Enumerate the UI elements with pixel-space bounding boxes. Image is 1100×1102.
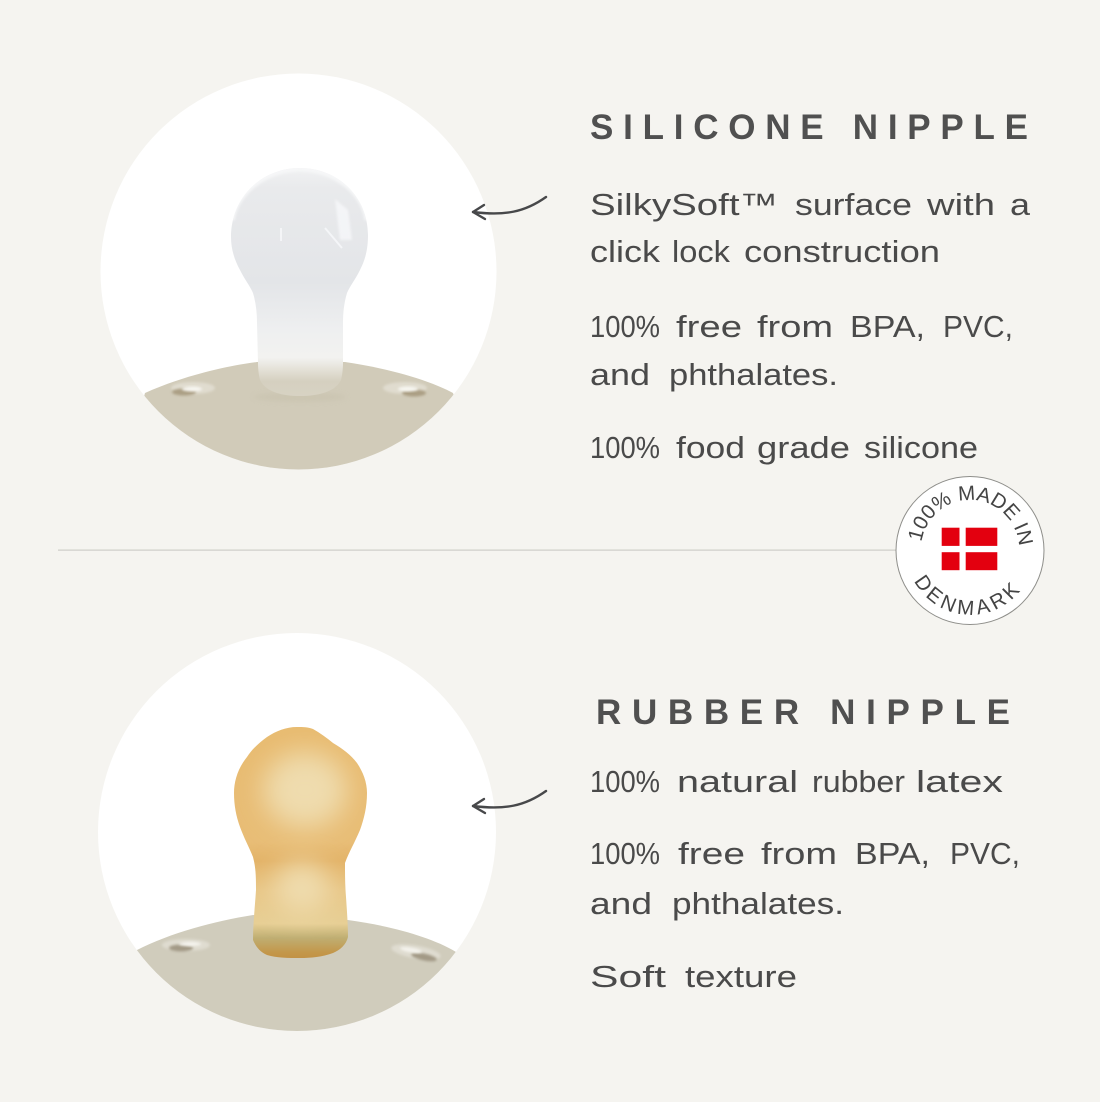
heading: silicone nipple: SILICONE NIPPLE xyxy=(590,108,1028,147)
badge: 100% made in Denmark xyxy=(896,476,1044,625)
text block: rubber features: texture xyxy=(685,959,797,994)
text block: silicone features: free xyxy=(676,309,742,344)
text block: rubber features: phthalates. xyxy=(672,886,844,921)
text block: rubber features: latex xyxy=(916,764,1004,799)
rubber nipple xyxy=(234,727,367,958)
badge text: DENMARK xyxy=(914,574,1020,615)
text block: silicone features: lock xyxy=(672,234,731,269)
text block: silicone features: with xyxy=(926,187,995,222)
text block: silicone features: phthalates. xyxy=(669,357,838,392)
heading: rubber nipple: RUBBER NIPPLE xyxy=(596,693,1010,732)
badge text: 100% MADE IN xyxy=(908,486,1033,545)
arrow: silicone xyxy=(473,197,546,219)
text block: silicone features xyxy=(590,187,1031,465)
text block: rubber features: from xyxy=(761,836,837,871)
text block: rubber features: rubber xyxy=(812,764,905,799)
text block: rubber features: 100% xyxy=(590,836,660,871)
text block: silicone features: grade xyxy=(757,430,850,465)
text block: silicone features: 100% xyxy=(590,309,660,344)
section divider line xyxy=(58,550,898,551)
text block: silicone features: a xyxy=(1010,187,1031,222)
text block: silicone features: 100% xyxy=(590,430,660,465)
icon: Danish flag xyxy=(942,528,997,570)
text block: silicone features: BPA, xyxy=(850,309,925,344)
text block: silicone features: SilkySoft™ xyxy=(590,187,778,222)
text block: silicone features: construction xyxy=(744,234,940,269)
panel: rubber nipple photo xyxy=(98,633,496,1040)
panel: silicone nipple photo xyxy=(100,74,496,480)
text block: rubber features: PVC, xyxy=(950,836,1020,871)
text block: rubber features: 100% xyxy=(590,764,660,799)
silicone nipple xyxy=(231,168,368,396)
pacifier shield (silicone) xyxy=(144,362,454,470)
arrow: rubber xyxy=(473,791,546,813)
text block: silicone features: and xyxy=(590,357,650,392)
badge text xyxy=(908,486,1033,615)
text block: rubber features: free xyxy=(678,836,745,871)
text block: rubber features: and xyxy=(590,886,652,921)
text block: rubber features: Soft xyxy=(590,959,667,994)
text block: silicone features: click xyxy=(590,234,661,269)
text block: silicone features: food xyxy=(676,430,745,465)
pacifier shield (rubber) xyxy=(137,915,456,1031)
text block: silicone features: silicone xyxy=(864,430,978,465)
text block: silicone features: PVC, xyxy=(943,309,1013,344)
text block: rubber features xyxy=(590,764,1020,994)
text block: rubber features: BPA, xyxy=(855,836,930,871)
text block: rubber features: natural xyxy=(677,764,798,799)
text block: silicone features: surface xyxy=(795,187,912,222)
text block: silicone features: from xyxy=(757,309,833,344)
